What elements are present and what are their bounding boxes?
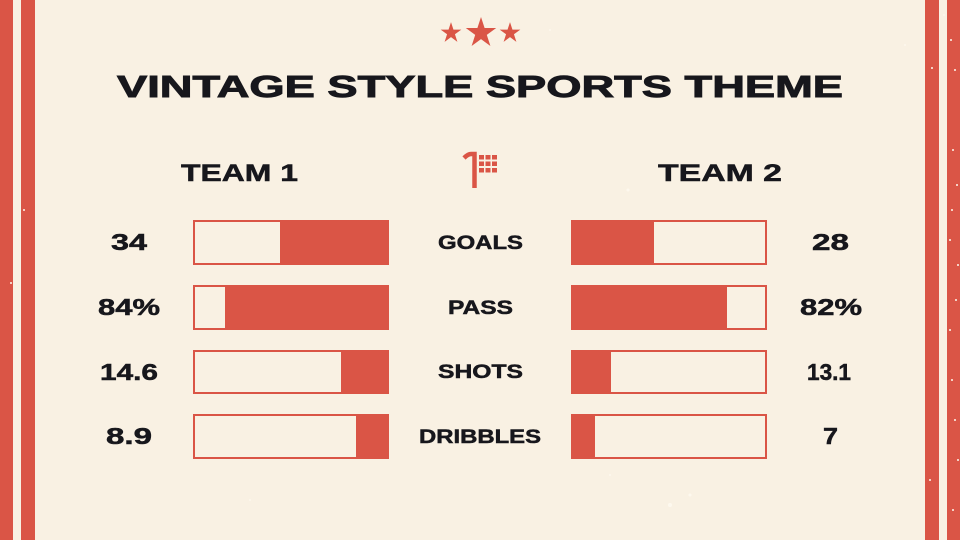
heading: team 1: TEAM 1 bbox=[181, 160, 298, 187]
team 1 pass bar bbox=[194, 285, 389, 330]
heading: team 2: TEAM 2 bbox=[658, 160, 782, 187]
team 2 dribbles value: 7 bbox=[823, 423, 838, 449]
left border stripes bbox=[0, 0, 35, 540]
team 2 pass value: 82% bbox=[800, 294, 862, 320]
pass label: PASS bbox=[448, 298, 513, 319]
row: goals bbox=[111, 220, 849, 265]
team 1 goals value: 34 bbox=[111, 229, 147, 255]
team 1 shots bar bbox=[194, 350, 389, 394]
team 1 goals bar bbox=[194, 220, 389, 265]
icon: three stars bbox=[441, 17, 520, 46]
team 2 shots value: 13.1 bbox=[807, 359, 851, 385]
team 2 goals bar bbox=[571, 220, 766, 265]
row: shots bbox=[100, 350, 851, 394]
team 1 dribbles bar bbox=[194, 414, 389, 459]
team 2 pass bar bbox=[571, 285, 766, 330]
shots label: SHOTS bbox=[438, 362, 523, 383]
team 1 pass value: 84% bbox=[98, 294, 160, 320]
dribbles label: DRIBBLES bbox=[419, 427, 541, 448]
goals label: GOALS bbox=[438, 233, 523, 254]
team 2 goals value: 28 bbox=[812, 229, 849, 255]
team 2 shots bar bbox=[571, 350, 766, 394]
right border stripes bbox=[925, 0, 960, 540]
row: pass bbox=[98, 285, 862, 330]
title: VINTAGE STYLE SPORTS THEME bbox=[117, 69, 843, 104]
team 1 dribbles value: 8.9 bbox=[106, 423, 152, 449]
row: dribbles bbox=[106, 414, 838, 459]
team 1 shots value: 14.6 bbox=[100, 359, 158, 385]
icon: stick and net bbox=[464, 154, 497, 188]
team 2 dribbles bar bbox=[571, 414, 766, 459]
